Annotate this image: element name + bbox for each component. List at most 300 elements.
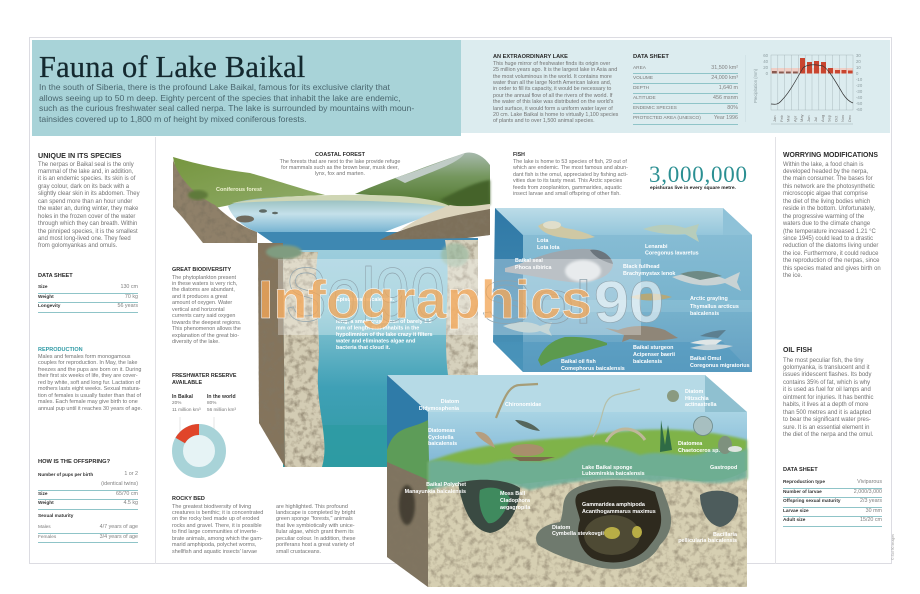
right column: oil fish data sheet: Offspring sexual maturity <box>783 499 841 504</box>
gastropod <box>510 444 555 461</box>
climate chart: 30 <box>856 53 861 58</box>
right column: oil fish data sheet: Larvae size <box>783 508 809 514</box>
heading: REPRODUCTION <box>38 347 83 353</box>
body: of plants and to over 1,500 animal species. <box>493 118 595 124</box>
lakebed labels: Lake Baikal sponge <box>582 465 632 471</box>
legend: in the world: 80% <box>207 400 216 405</box>
body <box>493 61 618 124</box>
body: lynx, fox and marten. <box>315 171 365 177</box>
legend: in the world <box>207 394 236 412</box>
sand bed <box>428 470 747 587</box>
left column: seal data sheet <box>38 273 138 313</box>
climate chart: -60 <box>856 107 863 112</box>
lakebed labels: Cyclotella <box>428 435 454 441</box>
body: The most peculiar fish, the tiny <box>783 358 864 364</box>
white water text: bacteria that cloud it. <box>336 345 391 351</box>
cavity: large <box>536 480 671 569</box>
legend: in Baikal: In Baikal <box>172 394 193 400</box>
left column: offspring table: Males <box>38 525 51 530</box>
right column: oil fish data sheet: Viviparous <box>857 479 882 485</box>
climate chart: Sep <box>826 114 832 122</box>
fish labels: Coregonus lavaretus <box>645 250 699 256</box>
lakebed labels: Lubomirskia baicalensis <box>582 471 645 477</box>
body: pour the annual flow of all the rivers of the world. If <box>493 93 612 99</box>
white water text: mm of length that inhabits in the <box>336 326 419 332</box>
body: 20 cm. Lake Baikal is home to virtually 1,100 species <box>493 112 618 118</box>
body: issues iridescent flashes. Its body <box>783 372 871 378</box>
right column: oil fish <box>783 347 874 438</box>
left column: seal data sheet: 56 years <box>118 303 138 309</box>
lakebed labels: Diatomeas <box>428 428 455 434</box>
extraordinary lake text block <box>493 54 618 124</box>
white water text <box>335 297 432 351</box>
climate chart: 20 <box>856 59 861 64</box>
body: diversity of the lake. <box>172 339 220 345</box>
body <box>38 162 140 249</box>
plants <box>660 420 672 452</box>
body <box>172 274 241 345</box>
body: this species mated and gives birth on <box>783 266 881 272</box>
body: insect larvae and small offspring of other fish. <box>513 191 621 197</box>
body: microscopic algae that comprise <box>783 191 868 197</box>
body: the diet of the nerpa and the omul. <box>783 432 873 438</box>
right column: oil fish data sheet: Number of larvae <box>783 490 822 494</box>
body: reside in the bottom. Unfortunately, <box>783 206 875 212</box>
left column: unique in its species <box>38 151 140 249</box>
body: land surface, it would form a uniform water layer of <box>493 106 613 112</box>
left column: offspring table: Sexual maturity <box>38 514 73 519</box>
right column: oil fish data sheet: 15/20 cm <box>860 517 882 523</box>
body <box>513 159 628 197</box>
lake surface <box>228 196 453 232</box>
data sheet table <box>633 54 738 125</box>
right column: oil fish data sheet: Adult size <box>783 518 805 523</box>
lakebed labels: Baikal Polychet <box>426 482 466 488</box>
body: the reproduction of the nerpas, since <box>783 258 879 264</box>
right shore and rock <box>400 204 490 230</box>
lakebed labels: Gammaridea amphipoda <box>582 502 646 508</box>
heading: DATA SHEET <box>633 54 669 60</box>
body column 2: that live symbiotically with unice- <box>276 523 355 529</box>
body: dant fish is the omul, appreciated by fishing acti- <box>513 172 628 178</box>
column divider left <box>155 137 156 564</box>
body: The phytoplankton present <box>172 274 236 280</box>
fish: oil fish <box>538 337 607 366</box>
body <box>38 354 142 412</box>
pale rock front right <box>445 240 478 375</box>
watermark: 90 <box>594 270 664 335</box>
body column 1: shellfish and aquatic insects' larvae <box>172 549 257 555</box>
fish labels <box>515 238 750 372</box>
legend: in Baikal: 20% <box>172 400 181 405</box>
data sheet table: 24,000 km³ <box>711 75 738 81</box>
data sheet table: PROTECTED AREA (UNESCO) <box>633 116 701 121</box>
right column: oil fish data sheet <box>783 467 882 527</box>
left column: offspring table: Weight <box>38 501 54 506</box>
climate chart: Dec <box>847 115 852 122</box>
intro text: In the south of Siberia, there is the profound Lake Baikal, famous for its exclusive clarity that <box>39 82 390 92</box>
body: contains 35% of fat, which is why <box>783 380 870 386</box>
fish labels: Brachymystax lenok <box>623 271 675 277</box>
column divider right <box>775 137 776 564</box>
data sheet table: ALTITUDE <box>633 96 656 101</box>
left rock mass <box>173 160 257 243</box>
left column: offspring table: 65/70 cm <box>116 490 138 496</box>
body: developed headed by the nerpa, <box>783 169 868 175</box>
lakebed labels: Didymosphenia <box>419 406 460 412</box>
climate chart: Jul <box>813 117 818 122</box>
mountain left <box>173 157 325 208</box>
lakebed labels: Manayunkia baicalensis <box>405 489 466 495</box>
heading <box>172 373 236 386</box>
caption: epishuras live in every square metre. <box>650 186 736 191</box>
fish block <box>493 208 752 372</box>
body: Males and females form monogamous <box>38 354 130 360</box>
fish labels: Lota <box>537 238 549 244</box>
climate chart: 60 <box>763 53 769 58</box>
body: water than all the large North American lakes and, <box>493 80 611 86</box>
body: annual pup until it reaches 30 years of age. <box>38 406 142 412</box>
climate chart: Nov <box>840 115 845 122</box>
sponge band <box>428 445 747 490</box>
body <box>783 358 874 438</box>
body column 2: are highlighted. This profound <box>276 504 348 510</box>
body: and it produces a great <box>172 294 227 300</box>
body: red by white, soft and long fur. Lactation of <box>38 380 140 386</box>
body: from golomyankas and omuls. <box>38 243 117 249</box>
body: the most voluminous in the world. It contains more <box>493 74 612 80</box>
right column: oil fish data sheet: 2,000/3,000 <box>854 488 882 494</box>
lakebed labels: Chironomidae <box>505 402 541 408</box>
climate chart: -40 <box>856 95 863 100</box>
legend: in Baikal <box>172 394 201 412</box>
body: through which they can breath. Within <box>38 221 137 227</box>
fish labels: baicalensis <box>633 359 662 365</box>
cavity: right <box>700 491 738 527</box>
fish: seal <box>505 249 613 282</box>
fish: black-fin <box>630 294 672 300</box>
label: coniferous forest: Coniferous forest <box>216 187 262 193</box>
water surface stripe <box>257 232 478 250</box>
right column: worrying modifications <box>783 152 881 279</box>
lakebed labels: Diatomea <box>678 441 703 447</box>
climate chart: Feb <box>779 114 784 122</box>
body: the progressive warming of the <box>783 214 864 220</box>
body: feeds from zooplankton, gammarides, aquatic <box>513 185 622 191</box>
data sheet table: DEPTH <box>633 86 649 91</box>
body column 1: creatures is benthic; it is concentrated <box>172 510 263 516</box>
body: freezes and the pups are born on it. During <box>38 366 141 372</box>
body column 2: small crustaceans. <box>276 549 321 555</box>
climate chart: 20 <box>763 65 769 70</box>
data sheet table: 80% <box>727 105 738 111</box>
heading: DATA SHEET <box>783 467 818 473</box>
great biodiversity text <box>172 267 241 345</box>
body: Within the lake, a food chain is <box>783 162 864 168</box>
number: 3,000,000 <box>649 162 748 187</box>
climate chart <box>745 53 863 124</box>
fish labels: Baikal oil fish <box>561 359 596 365</box>
diatoms <box>667 390 679 402</box>
body: This huge mirror of freshwater finds its origin over <box>493 61 610 67</box>
body: habits, it lives at a depth of more <box>783 402 868 408</box>
big number callout <box>649 162 748 191</box>
left column: seal data sheet: Weight <box>38 294 54 300</box>
body column 1: The greatest biodiversity of living <box>172 504 251 510</box>
body: the water of this lake was distributed on the world's <box>493 99 613 105</box>
green meadow band <box>428 430 747 490</box>
body: ointment for injuries. It has benthic <box>783 395 873 401</box>
title: Fauna of Lake Baikal <box>39 50 305 84</box>
body: amount of oxygen. Water <box>172 300 232 306</box>
fish text <box>513 152 628 197</box>
body: it is an endemic species. Its skin is of <box>38 176 135 182</box>
left column: offspring table: 4.5 kg <box>123 500 138 506</box>
larva: thin <box>593 389 640 437</box>
cavity: medium <box>458 480 520 533</box>
climate chart: 40 <box>763 59 769 64</box>
body: The lake is home to 53 species of fish, 29 out of <box>513 159 627 165</box>
heading: GREAT BIODIVERSITY <box>172 267 231 273</box>
climate chart: May <box>799 114 804 122</box>
left column: offspring table: Females <box>38 534 56 540</box>
body: This phenomenon allows the <box>172 326 241 332</box>
fish: lenarabi <box>643 224 699 242</box>
climate chart: -10 <box>856 77 863 82</box>
body column 2: poriferans host a great variety of <box>276 542 354 548</box>
heading: OIL FISH <box>783 347 812 354</box>
body: currents carry said oxygen <box>172 313 235 319</box>
small creatures <box>475 432 495 448</box>
body: reduction of the diatoms living under <box>783 243 878 249</box>
body: the pinniped species, it is the smallest <box>38 229 138 235</box>
fish labels: Comephorus baicalensis <box>561 366 625 372</box>
watermark: Sol <box>480 269 592 336</box>
lakebed labels: Acanthogammarus maximus <box>582 509 656 515</box>
body: waters due to the climate change <box>783 221 870 227</box>
water column face <box>283 240 478 467</box>
white water text: hypolimnion of the lake crazy it filters <box>336 332 432 338</box>
arc worm <box>606 429 645 442</box>
body: the water an, during winter, they make <box>38 206 138 212</box>
fish: grayling <box>672 271 741 291</box>
right column: oil fish data sheet: 2/3 years <box>860 498 882 504</box>
lakebed labels: actinastrella <box>685 402 717 408</box>
left column: offspring table: Number of pups per birth <box>38 472 93 477</box>
climate chart: Oct <box>834 115 838 122</box>
body: towards the deepest regions. <box>172 320 241 326</box>
left column: seal data sheet: Size <box>38 285 48 290</box>
body column 1: marid amphipoda, polychet worms, <box>172 542 256 548</box>
body: The nerpas or Baikal seal is the only <box>38 162 134 168</box>
credit: © Sol 90 Images <box>891 534 895 560</box>
climate chart: 10 <box>856 65 861 70</box>
fish labels: baicalensis <box>690 311 719 317</box>
body: the main consumer. The bases for <box>783 176 873 182</box>
body: the ice. Furthermore, it could reduce <box>783 251 878 257</box>
fish: pale cisco <box>503 322 552 336</box>
fish labels: Phoca sibirica <box>515 265 553 271</box>
data sheet table: AREA <box>633 66 646 70</box>
heading: FISH <box>513 152 525 158</box>
body column 2: green sponge "forests," animals <box>276 516 353 522</box>
body: couples for reproduction. In May, the lake <box>38 360 137 366</box>
intro text <box>39 82 414 124</box>
header band: title and intro <box>32 40 461 136</box>
pale rock front left <box>283 252 324 467</box>
lakebed labels: pellicularia baicalensis <box>678 538 737 544</box>
data sheet table: 1,640 m <box>719 85 738 91</box>
fish labels: Baikal seal <box>515 258 543 264</box>
body: golomyanka, is translucent and it <box>783 365 869 371</box>
left grass <box>387 420 430 500</box>
body: this network are the photosynthetic <box>783 184 875 190</box>
left column: reproduction <box>38 347 142 412</box>
left column: offspring table: Size <box>38 492 48 496</box>
climate chart: Apr <box>792 115 798 122</box>
left column: offspring table: 3/4 years of age <box>100 534 138 540</box>
body column 1: to find large communities of inverte- <box>172 529 258 535</box>
coastal landscape block <box>173 152 490 467</box>
body column 1: brate animals, among which the gam- <box>172 536 263 542</box>
body: in these waters is very rich, <box>172 281 237 287</box>
legend: in the world: In the world <box>207 394 236 400</box>
left column: seal data sheet: 70 kg <box>125 294 138 300</box>
body: the diatoms are abundant, <box>172 287 235 293</box>
lakebed labels: Diatom <box>552 525 570 531</box>
fish labels: Baikal Omul <box>690 356 722 362</box>
donut chart <box>172 417 226 478</box>
body: their first six weeks of life, they are cover- <box>38 373 138 379</box>
heading: DATA SHEET <box>38 273 73 279</box>
body: the ice. <box>783 273 802 279</box>
heading: ROCKY BED <box>172 496 205 502</box>
white water text: water and eliminates algae and <box>335 338 415 344</box>
data sheet table: 456 msnm <box>713 95 738 101</box>
climate chart: -50 <box>856 101 863 106</box>
body: explanation of the great bio- <box>172 333 239 339</box>
body: holes in the frozen cover of the water <box>38 214 135 220</box>
body column 1: on the rocky bed made up of eroded <box>172 516 259 522</box>
lakebed labels: Hitzschia <box>685 396 710 402</box>
fish labels: Thymallus arcticus <box>690 304 739 310</box>
lakebed labels: Gastropod <box>710 465 737 471</box>
heading: AN EXTRAORDINARY LAKE <box>493 54 568 60</box>
white water text: Epischura baicalensis. <box>336 297 395 303</box>
fish labels: Lota lota <box>537 245 560 251</box>
intro text: tainsides covered up to 1,800 m of height by mixed coniferous forests. <box>39 114 307 124</box>
lakebed labels: Cymbella stevkovgii <box>552 531 604 537</box>
body column 2 <box>276 504 356 555</box>
body: (the temperature increased 1.21 °C <box>783 229 876 235</box>
body: mothers lasts eight weeks. Sexual matura- <box>38 386 140 392</box>
body: sure. It is an essential element in <box>783 425 869 431</box>
rocky bed text <box>172 496 356 555</box>
body: gray colour, dark on its back with a <box>38 184 129 190</box>
intro text: allows seeing up to 50 m deep. Eighty percent of the species that inhabit the lake are endemic, <box>39 93 401 103</box>
left column: offspring table: 4/7 years of age <box>100 524 138 530</box>
body column 2: landscape is completed by bright <box>276 510 355 516</box>
left column: offspring table: 1 or 2 <box>124 471 138 477</box>
body: which are endemic. The most famous and abun- <box>513 165 628 171</box>
mountain right <box>355 152 490 206</box>
body: mammal of the lake and, in addition, <box>38 169 133 175</box>
white water text: long, a small crustacean of barely 1.5 <box>336 319 432 325</box>
watermark: Sol90 <box>285 253 445 338</box>
body: since 1945) could lead to a drastic <box>783 236 873 242</box>
data sheet table: ENDEMIC SPECIES <box>633 106 677 111</box>
fish: sturgeon <box>605 326 678 342</box>
climate chart: 0 <box>856 71 859 76</box>
lakebed labels: Moss Ball <box>500 491 526 497</box>
data sheet table: Year 1996 <box>714 115 738 121</box>
body <box>280 159 400 177</box>
body: it is used as fuel for oil lamps and <box>783 387 871 393</box>
intro text: such as the curious freshwater seal called nerpa. The lake is surrounded by mountains with moun- <box>39 103 414 113</box>
fish labels: Lenarabi <box>645 244 668 250</box>
body: and most long-lived one. They feed <box>38 236 131 242</box>
fish labels: Black fullhead <box>623 264 660 270</box>
right column: oil fish data sheet: 30 mm <box>866 508 882 514</box>
heading: FRESHWATER RESERVE <box>172 373 236 379</box>
body: for mammals such as the brown bear, musk deer, <box>281 165 399 171</box>
legend: in the world: 56 million km³ <box>207 407 236 412</box>
lakebed labels: Bacillaria <box>713 532 738 538</box>
coastal forest text <box>280 152 400 177</box>
body: The forests that are next to the lake provide refuge <box>280 159 400 165</box>
body: the diet of the living bodies which <box>783 199 870 205</box>
heading: UNIQUE IN ITS SPECIES <box>38 151 121 160</box>
heading: HOW IS THE OFFSPRING? <box>38 459 110 465</box>
lakebed labels: Diatom <box>441 399 459 405</box>
climate chart: Aug <box>820 115 825 122</box>
fish labels: Baikal sturgeon <box>633 345 673 351</box>
heading: COASTAL FOREST <box>315 152 365 158</box>
freshwater reserve <box>172 373 236 478</box>
small rocks in lake <box>236 216 254 222</box>
lakebed labels: baicalensis <box>428 441 457 447</box>
body: tion of females is usually faster than that of <box>38 392 141 398</box>
right column: oil fish data sheet: Reproduction type <box>783 480 825 485</box>
body: can spend more than an hour under <box>38 199 132 205</box>
body: vities due to its tasty meat. This Arctic species <box>513 178 622 184</box>
body column 2: llular algae, which grant them its <box>276 529 354 535</box>
body column 2: peculiar colour. In addition, these <box>276 536 356 542</box>
fish: burbot <box>538 221 595 239</box>
left column: offspring table <box>38 459 138 543</box>
legend: in Baikal: 11 million km³ <box>172 407 201 412</box>
body: slightly clear skin in its abdomen. They <box>38 191 140 197</box>
climate chart: Mar <box>786 114 790 122</box>
lakebed block <box>387 375 747 587</box>
body: in order to fill its capacity, it would be necessary to <box>493 86 611 92</box>
climate chart: -20 <box>856 83 863 88</box>
fish labels: Coregonus migratorius <box>690 363 750 369</box>
heading: WORRYING MODIFICATIONS <box>783 152 878 159</box>
left rock side <box>387 462 428 587</box>
lakebed labels: Chaetoceros sp. <box>678 448 720 454</box>
left column: offspring table: (identical twins) <box>101 480 138 486</box>
lakebed labels: Diatom <box>685 389 703 395</box>
body: to bear the significant water pres- <box>783 417 871 423</box>
data sheet table: VOLUME <box>633 76 653 81</box>
heading: AVAILABLE <box>172 380 202 386</box>
body: 25 million years ago. It is the largest lake in Asia and <box>493 67 617 73</box>
watermark: Infographics <box>258 270 592 330</box>
body <box>783 162 881 279</box>
climate chart: -30 <box>856 89 863 94</box>
climate chart: Jan <box>772 116 777 122</box>
